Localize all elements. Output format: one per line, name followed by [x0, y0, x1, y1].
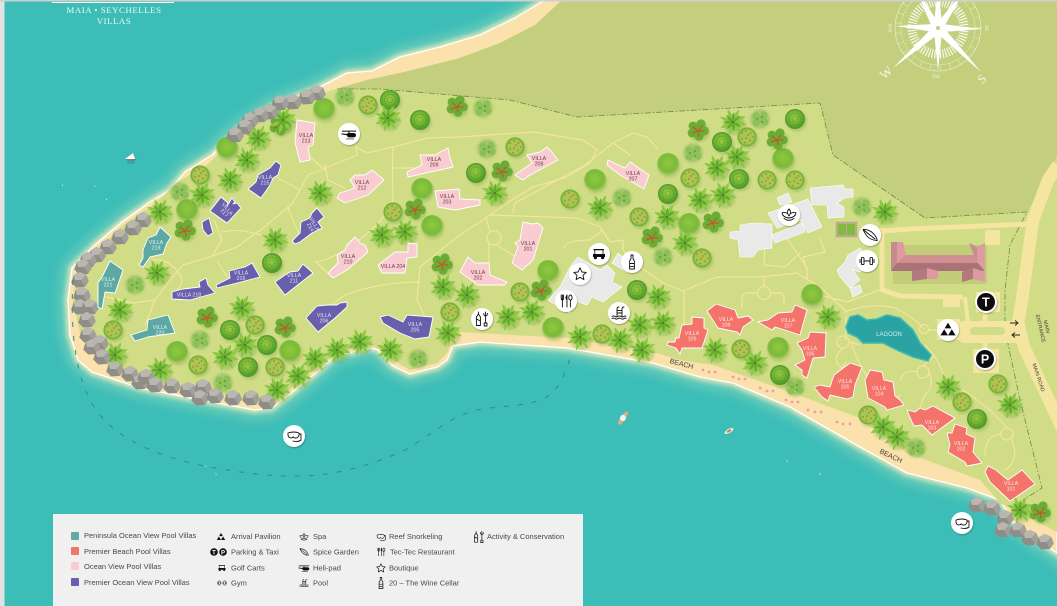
villa 109: 109	[688, 336, 696, 342]
villa 109	[667, 317, 708, 354]
villa 108	[707, 304, 753, 335]
villa 102	[947, 424, 982, 466]
villa 105: 105	[841, 384, 849, 390]
resort main building	[891, 242, 987, 284]
marker: golf carts	[588, 243, 610, 265]
villa 102: VILLA	[954, 441, 969, 447]
villa 221: VILLA	[101, 277, 116, 283]
villa 217: VILLA	[220, 202, 234, 217]
villa 107: 107	[784, 324, 792, 330]
villa 101: 101	[1007, 486, 1015, 492]
villa 218: VILLA 218	[177, 292, 201, 298]
villa 213: 213	[302, 138, 310, 144]
garden paths	[107, 132, 1015, 470]
villa 214: 214	[305, 222, 315, 233]
villa 202: 202	[474, 276, 482, 282]
rocks south-east shore	[968, 497, 1054, 550]
villa 215: VILLA	[258, 175, 273, 181]
compass rose	[893, 0, 982, 72]
villa 216: VILLA	[234, 270, 249, 276]
title rule	[52, 2, 174, 3]
legend: snorkel column	[377, 532, 460, 589]
villa 215: 215	[261, 180, 269, 186]
marker: restaurant	[555, 290, 577, 312]
central buildings	[548, 185, 867, 313]
villa 105: VILLA	[838, 379, 853, 385]
rocks west shore	[71, 85, 326, 410]
legend: villa types: Peninsula Ocean View Pool Villas	[84, 531, 197, 540]
villa 201: 201	[524, 246, 532, 252]
villa 206: 206	[320, 318, 328, 324]
villa 104: VILLA	[872, 386, 887, 392]
villa 211	[275, 264, 313, 295]
villas premier ocean view	[172, 161, 433, 339]
small fish and boats	[62, 184, 821, 475]
villa 203	[435, 189, 480, 210]
marker: spice garden	[859, 224, 881, 246]
resort drive and parking	[880, 224, 1030, 373]
main entrance label: MAIN	[1042, 320, 1050, 334]
main entrance label: ENTRANCE	[1034, 314, 1046, 344]
villa 201	[512, 222, 543, 270]
villa 207: VILLA	[626, 171, 641, 177]
villa 106: 106	[806, 352, 814, 358]
villa 105	[814, 363, 862, 401]
villa 219	[139, 227, 171, 267]
boat: sailboat	[125, 153, 137, 164]
property boundary line	[337, 89, 1042, 500]
compass labels: SE	[983, 25, 989, 32]
legend: spa column: Spice Garden	[313, 548, 359, 556]
villa 103: VILLA	[925, 420, 940, 426]
trees: blobs	[166, 98, 824, 366]
villa 220: VILLA	[153, 325, 168, 331]
villa 206	[306, 302, 347, 332]
marker: snorkel west	[283, 425, 305, 447]
spice garden	[836, 222, 857, 237]
villa 201: VILLA	[521, 241, 536, 247]
marker: activity and conservation	[471, 308, 493, 330]
villa 208: VILLA	[532, 156, 547, 162]
villa 219: 219	[152, 246, 160, 252]
legend: arrival and parking column: Arrival Pavilion	[231, 532, 281, 541]
villa 220	[131, 315, 175, 341]
villa 101: VILLA	[1004, 481, 1019, 487]
villa 103	[907, 406, 955, 435]
trees: flowering with branches	[175, 95, 1052, 524]
compass labels: NW	[888, 23, 894, 33]
villa 212: 212	[358, 186, 366, 192]
marker: parking: P	[981, 352, 989, 366]
boat: yacht	[616, 410, 630, 426]
villa 221	[98, 261, 123, 309]
villa 215	[248, 161, 281, 198]
entrance arrows	[1010, 320, 1020, 338]
legend: snorkel column: Boutique	[389, 564, 419, 572]
villa 205: VILLA	[408, 322, 423, 328]
snorkel route dashed	[72, 280, 572, 476]
beach label west: BEACH	[669, 358, 694, 371]
villa 216: 216	[237, 276, 245, 282]
compass labels	[877, 23, 990, 87]
marker: helipad	[338, 123, 360, 145]
villa 217	[202, 197, 241, 236]
compass labels: S	[974, 71, 990, 87]
villa 212	[337, 170, 384, 203]
main road	[1018, 165, 1057, 428]
title: MAIA • SEYCHELLES	[66, 5, 162, 15]
compass labels: W	[877, 62, 896, 82]
villa 213	[295, 120, 315, 162]
villa 212: VILLA	[355, 180, 370, 186]
villa 104: 104	[875, 392, 883, 398]
legend: spa column: Heli-pad	[313, 564, 341, 572]
marker: snorkel east	[951, 512, 973, 534]
trees: ferns	[125, 87, 926, 458]
legend: villa types	[71, 531, 197, 587]
villa 211: 211	[290, 278, 298, 284]
legend: activity	[475, 531, 564, 543]
legend: arrival and parking column: P	[221, 551, 225, 557]
villa 214	[292, 208, 324, 244]
villa 214: VILLA	[308, 217, 320, 233]
villa 208	[515, 147, 558, 180]
villa 205: 205	[411, 328, 419, 334]
villas ocean view	[295, 120, 649, 285]
legend: arrival and parking column	[210, 532, 281, 588]
title: VILLAS	[97, 16, 131, 26]
trees: speckled flowering	[103, 95, 1009, 427]
villas peninsula ocean view	[98, 227, 175, 341]
trees: palms	[101, 104, 1034, 524]
villa 205	[380, 315, 433, 339]
legend: snorkel column: 20 – The Wine Cellar	[389, 578, 460, 588]
villa 216	[216, 263, 260, 288]
villa 209: VILLA	[427, 157, 442, 163]
villa 104	[865, 370, 904, 410]
legend: villa types: Premier Ocean View Pool Villas	[84, 578, 190, 587]
marker: spa	[778, 204, 800, 226]
villa 108: VILLA	[719, 317, 734, 323]
legend: villa types: Premier Beach Pool Villas	[84, 547, 171, 556]
marker: arrival pavilion	[937, 319, 959, 341]
villa 108: 108	[722, 322, 730, 328]
villa 202: VILLA	[471, 270, 486, 276]
villa 220: 220	[156, 330, 164, 336]
legend panel	[53, 514, 583, 606]
villa 203: VILLA	[440, 194, 455, 200]
villa 102: 102	[957, 446, 965, 452]
villa 202	[460, 257, 507, 285]
villa 101	[985, 466, 1035, 501]
lagoon: LAGOON	[876, 332, 902, 338]
legend: arrival and parking column: Golf Carts	[231, 564, 265, 572]
legend: snorkel column: Reef Snorkeling	[389, 532, 442, 541]
legend: activity: Activity & Conservation	[487, 532, 564, 541]
villa 217: 217	[219, 208, 229, 219]
legend: spa column: Pool	[313, 578, 328, 588]
villa 203: 203	[443, 200, 451, 206]
marker: taxi	[975, 291, 997, 313]
villa 218	[172, 278, 215, 300]
villa 206: VILLA	[317, 313, 332, 319]
marker: gym	[856, 250, 878, 272]
legend: spa column: Spa	[313, 532, 327, 541]
villa 204	[378, 243, 417, 273]
beach label east: BEACH	[878, 448, 903, 465]
marker: wine cellar	[621, 251, 643, 273]
villa 210: 210	[344, 260, 352, 266]
marker: pool	[608, 302, 630, 324]
marker: taxi: T	[982, 296, 990, 310]
title	[66, 5, 162, 26]
compass labels: SW	[932, 74, 941, 80]
villa 221: 221	[104, 282, 112, 288]
villa 106: VILLA	[803, 346, 818, 352]
villa 107: VILLA	[781, 318, 796, 324]
villas premier beach	[667, 304, 1035, 501]
hill area	[337, 0, 1057, 218]
villa 107	[758, 305, 807, 335]
main road label: MAIN ROAD	[1031, 363, 1045, 393]
marker: boutique	[569, 263, 591, 285]
villa 209: 209	[430, 162, 438, 168]
villa 211: VILLA	[287, 273, 302, 279]
legend: arrival and parking column: Gym	[231, 578, 247, 588]
villa 213: VILLA	[299, 133, 314, 139]
villa 210	[328, 237, 368, 278]
villa 208: 208	[535, 162, 543, 168]
trees: round bushes	[220, 90, 989, 432]
villa 109: VILLA	[685, 331, 700, 337]
legend: villa types: Ocean View Pool Villas	[84, 562, 162, 571]
lagoon	[846, 315, 931, 361]
boat: small	[724, 427, 734, 435]
legend: arrival and parking column: Parking & Taxi	[231, 548, 279, 556]
villa 209	[407, 148, 453, 177]
villa 219: VILLA	[149, 240, 164, 246]
villa 204: VILLA 204	[381, 264, 405, 270]
villa 106	[795, 332, 826, 378]
beach umbrellas	[702, 369, 851, 425]
villa 210: VILLA	[341, 254, 356, 260]
villa 207: 207	[629, 176, 637, 182]
legend: arrival and parking column: T	[212, 551, 216, 557]
marker: parking	[974, 348, 996, 370]
villa 207	[607, 160, 649, 189]
villa 103: 103	[928, 426, 936, 432]
legend: spa column	[298, 532, 359, 588]
legend: snorkel column: Tec-Tec Restaurant	[390, 548, 456, 556]
